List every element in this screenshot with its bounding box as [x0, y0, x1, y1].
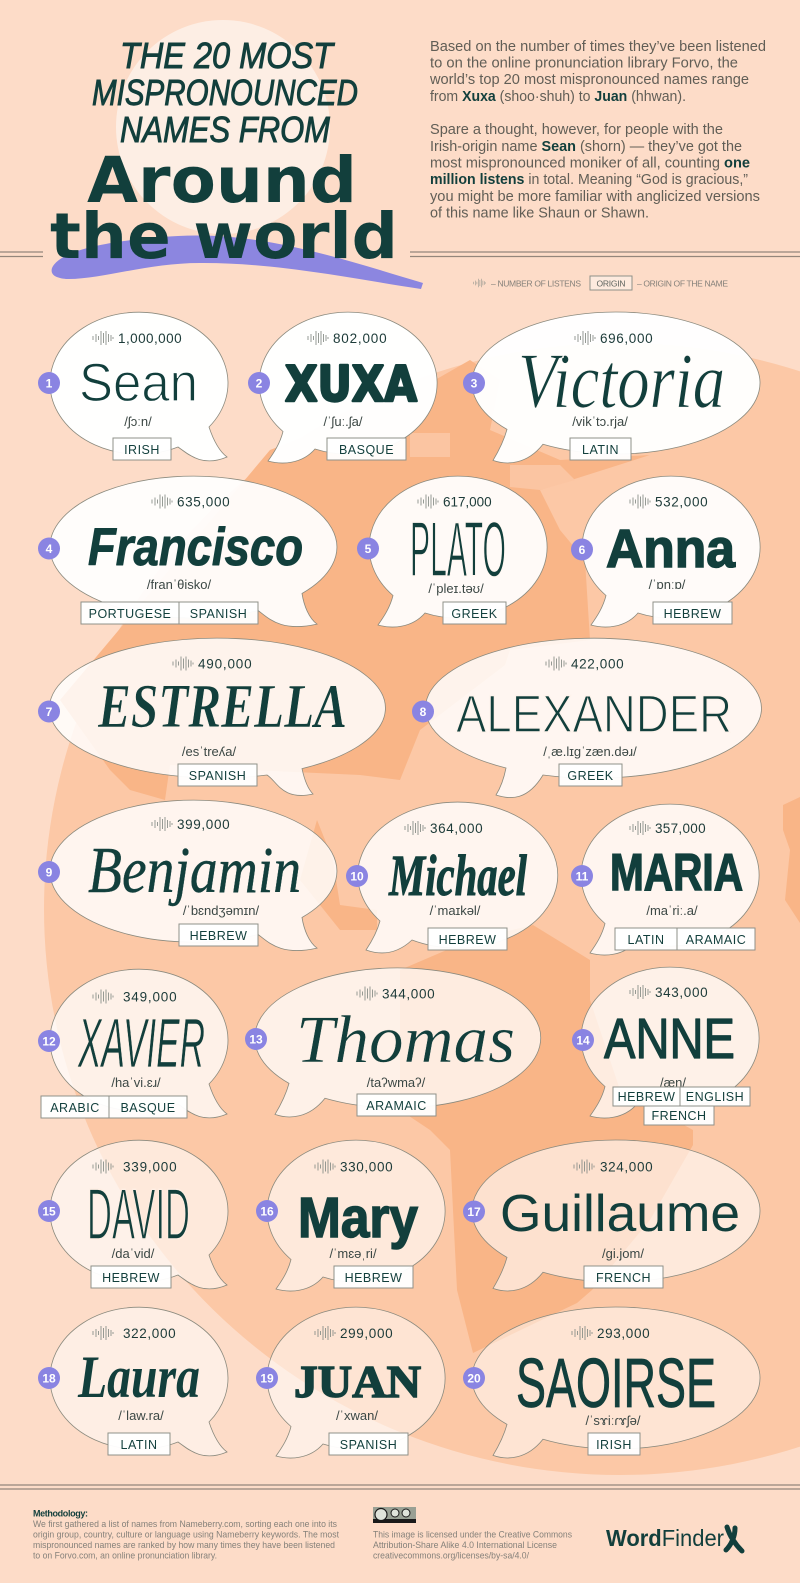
origin tag: LATIN: [582, 443, 619, 457]
listens: 802,000: [333, 331, 387, 346]
origin tag: FRENCH: [596, 1271, 651, 1285]
origin tag: GREEK: [451, 607, 498, 621]
origin tag: IRISH: [596, 1438, 632, 1452]
name 15: David: DAVID: [87, 1175, 190, 1255]
rank badge: [571, 865, 593, 887]
name: Guillaume: [500, 1185, 740, 1243]
pronunciation: /ʃɔːn/: [124, 414, 152, 429]
origin tag: HEBREW: [439, 933, 496, 947]
brush stroke: [52, 236, 423, 289]
lake patch: [410, 433, 575, 490]
name: Sean: [79, 353, 198, 413]
bubble: [369, 476, 547, 627]
listens: 339,000: [123, 1160, 177, 1174]
origin tag: [559, 764, 622, 786]
rank badge: 6: [579, 543, 586, 557]
origin tag: [443, 602, 506, 624]
rank badge: 14: [576, 1034, 590, 1048]
origin tag: [179, 924, 258, 946]
bubble: [259, 312, 437, 463]
licence text: Attribution-Share Alike 4.0 International License: [373, 1540, 557, 1551]
bubble: [472, 1140, 760, 1291]
listens: 696,000: [600, 331, 653, 346]
name 12: Xavier: [38, 969, 228, 1118]
bubble: [50, 800, 337, 951]
listens: [357, 986, 435, 1002]
origin tags: [81, 602, 258, 624]
rank badge: [572, 1029, 594, 1051]
continent: mid patch: [300, 820, 377, 930]
decorative rules: [0, 252, 800, 1489]
origin tag: LATIN: [120, 1438, 158, 1452]
bubble: [581, 804, 759, 955]
name 3: Victoria: [463, 312, 760, 463]
bubble: [425, 638, 761, 798]
rank badge: [245, 1028, 267, 1050]
name: Mary: [298, 1186, 418, 1250]
origin tag: [329, 1433, 408, 1455]
name: MARIA: [610, 844, 743, 902]
origin tag: [584, 1266, 663, 1288]
name 14: Anne: [572, 967, 759, 1125]
name 5: Plato: [357, 476, 547, 627]
name: Anna: [606, 519, 736, 579]
listens: [574, 1160, 653, 1174]
listens: [405, 821, 483, 836]
rank badge: 13: [249, 1032, 263, 1046]
name 11: Maria: [571, 804, 759, 955]
rank badge: [346, 865, 368, 887]
origin tag: [334, 1266, 413, 1288]
origin tag: [178, 764, 257, 786]
listens: [418, 494, 492, 510]
methodology: Methodology:: [33, 1508, 88, 1518]
origin tags: ENGLISH: [686, 1090, 744, 1104]
rank badge: [248, 372, 270, 394]
listens: 532,000: [655, 494, 708, 510]
bubble: [50, 1307, 228, 1456]
origin tag: [570, 438, 631, 460]
listens: 490,000: [198, 656, 252, 672]
origin tag: [327, 438, 406, 460]
pronunciation: /ˈsɤiːɾɤʃə/: [585, 1413, 641, 1428]
rank badge: 19: [260, 1372, 274, 1386]
origin tag: [357, 1094, 436, 1116]
rank badge: [38, 372, 60, 394]
rank badge: [256, 1200, 278, 1222]
title block: [50, 20, 423, 289]
methodology: [33, 1508, 339, 1562]
bubble: [472, 312, 760, 463]
origin tags: [41, 1096, 187, 1118]
bubble: [267, 1140, 445, 1291]
rank badge: 1: [46, 376, 53, 390]
title glow ellipse: [116, 20, 330, 234]
name: ANNE: [604, 1007, 735, 1071]
listens: 293,000: [597, 1326, 650, 1341]
origin tags: SPANISH: [190, 607, 247, 621]
title line 5: the world: [50, 200, 398, 273]
origin tag: [91, 1266, 171, 1288]
name 1: Sean: [38, 312, 228, 461]
origin tag: IRISH: [124, 443, 160, 457]
pronunciation: /ˈmaɪkəl/: [430, 903, 481, 918]
rank badge: 4: [46, 542, 53, 556]
pronunciation: /ˈɒnːɒ/: [649, 577, 686, 592]
origin tag: HEBREW: [102, 1271, 160, 1285]
listens: 617,000: [443, 494, 492, 510]
bubble: [50, 1140, 228, 1289]
rank badge: 16: [260, 1204, 274, 1218]
rank badge: 18: [42, 1372, 56, 1386]
listens: 344,000: [382, 986, 435, 1002]
logo: WordFinderX: WordFinder: [606, 1525, 724, 1551]
pronunciation: /maˈriː.a/: [646, 903, 698, 918]
origin tag: SPANISH: [340, 1438, 397, 1452]
name 20: Saoirse: [463, 1307, 760, 1458]
listens: [572, 1326, 650, 1341]
name: Thomas: [296, 1001, 515, 1077]
rank badge: 17: [467, 1205, 481, 1219]
name 6: Anna: [571, 476, 760, 627]
name 18: Laura: [38, 1307, 228, 1456]
rank badge: 12: [42, 1034, 56, 1048]
pronunciation: /ˈbɛndʒəmɪn/: [183, 903, 259, 918]
rank badge: [38, 700, 60, 722]
name: Benjamin: [88, 834, 301, 907]
origin tags: [615, 928, 755, 950]
pronunciation: /esˈtreʎa/: [182, 744, 236, 759]
creative commons badge: [373, 1507, 416, 1523]
listens: [152, 817, 230, 832]
name: XUXA: [285, 356, 417, 413]
name 9: Benjamin: [38, 800, 337, 951]
origin tag: ARAMAIC: [366, 1099, 427, 1113]
bubble: [267, 1307, 445, 1458]
origin tags: ARAMAIC: [686, 933, 746, 947]
listens: 1,000,000: [118, 331, 182, 346]
rank badge: 15: [42, 1204, 56, 1218]
rank badge: [412, 700, 434, 722]
legend origin word: ORIGIN: [596, 278, 626, 288]
bubble: [50, 312, 228, 461]
intro paragraph: [429, 39, 766, 222]
listens: [93, 1326, 176, 1341]
listens: 357,000: [655, 821, 706, 836]
licence text: [373, 1530, 572, 1562]
name: Francisco: [88, 518, 303, 577]
origin tag: [588, 1433, 640, 1455]
name 4: Francisco: [38, 476, 337, 627]
intro paragraph: most mispronounced moniker of all, counting one: [430, 156, 750, 172]
name 7: Estrella: [38, 638, 385, 795]
title line 2: MISPRONOUNCED: [92, 72, 358, 113]
rank badge: [463, 1200, 485, 1222]
rank badge: [38, 1200, 60, 1222]
listens: 343,000: [655, 985, 708, 1000]
origin tags: FRENCH: [651, 1109, 707, 1123]
name: Victoria: [518, 337, 725, 424]
bubble: [358, 802, 558, 953]
methodology: origin group, country, culture or language using Nameberry keywords. The most: [33, 1530, 339, 1540]
rank badge: 3: [471, 376, 478, 390]
name: JUAN: [294, 1356, 421, 1407]
listens: [93, 1160, 177, 1174]
name 10: Michael: [346, 802, 558, 953]
origin tag: HEBREW: [345, 1271, 402, 1285]
logo X mark: [726, 1527, 742, 1551]
origin tags: [613, 1087, 750, 1125]
listens: [546, 656, 624, 672]
rank badge: [357, 538, 379, 560]
name: ESTRELLA: [97, 673, 347, 741]
listens: [173, 656, 252, 672]
origin tag: BASQUE: [339, 443, 394, 457]
intro paragraph: to on the online pronunciation library Forvo, the: [430, 56, 738, 72]
intro paragraph: of this name like Shaun or Shawn.: [430, 206, 649, 222]
name 2: Xuxa: [248, 312, 437, 463]
legend: [474, 276, 728, 290]
listens: 364,000: [430, 821, 483, 836]
rank badge: [256, 1367, 278, 1389]
pronunciation: /ˈpleɪ.təʊ/: [428, 581, 484, 596]
rank badge: 8: [420, 705, 427, 719]
origin tags: HEBREW: [618, 1090, 675, 1104]
continent: right patch: [783, 797, 800, 923]
name 16: Mary: [256, 1140, 445, 1291]
pronunciation: /ˈʃuː.ʃa/: [323, 414, 363, 429]
intro paragraph: world’s top 20 most mispronounced names range: [429, 72, 749, 88]
listens: 349,000: [123, 990, 177, 1004]
name 5: Plato: PLATO: [410, 505, 506, 593]
listens: [152, 494, 230, 510]
rank badge: 10: [350, 870, 364, 884]
rank badge: [38, 538, 60, 560]
pronunciation: /ˈxwan/: [336, 1408, 378, 1423]
rank badge: [38, 861, 60, 883]
intro paragraph: million listens in total. Meaning “God is gracious,”: [430, 172, 748, 188]
listens: [630, 494, 708, 510]
intro paragraph: from Xuxa (shoo·shuh) to Juan (hhwan).: [430, 89, 686, 105]
icon: listens waveform: [474, 279, 486, 287]
bubble: [255, 968, 541, 1117]
rank badge: [38, 1030, 60, 1052]
pronunciation: /vikˈtɔ.rja/: [572, 414, 628, 429]
rank badge: 5: [365, 542, 372, 556]
intro paragraph: Irish-origin name Sean (shorn) — they’ve got the: [430, 139, 742, 155]
rank badge: 9: [46, 866, 53, 880]
name: Michael: [388, 843, 528, 908]
pronunciation: /franˈθisko/: [147, 577, 212, 592]
listens: 330,000: [340, 1160, 393, 1174]
licence text: This image is licensed under the Creative Commons: [373, 1530, 572, 1540]
continent: north america: [60, 360, 650, 800]
methodology: mispronounced names are ranked by how many times they have been listened: [33, 1540, 335, 1551]
licence text: creativecommons.org/licenses/by-sa/4.0/: [373, 1550, 529, 1562]
name 13: Thomas: [245, 968, 541, 1117]
bubble: [50, 969, 228, 1118]
rank badge: [463, 372, 485, 394]
origin tags: ARABIC: [50, 1101, 100, 1115]
name 15: David: [38, 1140, 228, 1289]
rank badge: [38, 1367, 60, 1389]
rank badge: 11: [576, 870, 589, 884]
origin tags: BASQUE: [120, 1101, 176, 1115]
name: XAVIER: [77, 1004, 205, 1082]
listens: [315, 1160, 393, 1174]
origin tags: PORTUGESE: [89, 607, 171, 621]
continent: south america: [400, 925, 693, 1353]
bubble: [49, 638, 385, 795]
legend label: listens: – NUMBER OF LISTENS: [491, 278, 581, 288]
globe background: [44, 343, 800, 1475]
origin tag: HEBREW: [664, 607, 721, 621]
pronunciation: /taʔwmaʔ/: [367, 1075, 426, 1090]
bubble: [472, 1307, 760, 1458]
origin tags: LATIN: [628, 933, 664, 947]
listens: 635,000: [177, 494, 230, 510]
origin tag: [428, 928, 507, 950]
listens: [93, 990, 177, 1004]
title line 1: THE 20 MOST: [120, 35, 336, 76]
origin tag: [108, 1433, 170, 1455]
rank badge: 2: [256, 376, 263, 390]
legend label: origin: – ORIGIN OF THE NAME: [637, 278, 728, 288]
listens: [315, 1326, 393, 1341]
listens: [630, 985, 708, 1000]
rank badge: 7: [46, 705, 53, 719]
name: ALEXANDER: [456, 685, 732, 744]
pronunciation: /ˈlaw.ra/: [118, 1408, 164, 1423]
title line 4: Around: [87, 144, 357, 217]
listens: [308, 331, 387, 346]
pronunciation: /gi.jom/: [602, 1246, 644, 1261]
listens: 399,000: [177, 817, 230, 832]
name 8: Alexander: [412, 638, 761, 798]
origin tag: [653, 602, 732, 624]
pronunciation: /ˈmɛəˌri/: [329, 1246, 377, 1261]
intro paragraph: you might be more familiar with anglicized versions: [430, 189, 760, 205]
bubble: [582, 476, 760, 627]
rank badge: 20: [467, 1372, 481, 1386]
title line 3: NAMES FROM: [120, 109, 330, 150]
pronunciation: /daˈvid/: [112, 1246, 155, 1261]
methodology: to on Forvo.com, an online pronunciation library.: [33, 1550, 217, 1562]
pronunciation: /ˌæ.lɪgˈzæn.dəɹ/: [543, 744, 637, 759]
name 19: Juan: [256, 1307, 445, 1458]
listens: 324,000: [600, 1160, 653, 1174]
pronunciation: /æn/: [660, 1075, 686, 1090]
intro paragraph: Spare a thought, however, for people with the: [430, 122, 723, 138]
bubble: [50, 476, 337, 627]
legend origin tag: [590, 276, 632, 290]
origin tag: GREEK: [567, 769, 614, 783]
rank badge: [571, 538, 593, 560]
bubble: [581, 967, 759, 1118]
listens: [630, 821, 706, 836]
methodology: We first gathered a list of names from Nameberry.com, sorting each one into its: [33, 1519, 337, 1530]
rank badge: [463, 1367, 485, 1389]
intro paragraph: Based on the number of times they’ve been listened: [430, 39, 766, 55]
listens: 322,000: [123, 1326, 176, 1341]
name: Laura: [77, 1344, 200, 1410]
name 17: Guillaume: [463, 1140, 760, 1291]
pronunciation: /haˈvi.ɛɹ/: [111, 1075, 161, 1090]
listens: [575, 331, 653, 346]
listens: 422,000: [571, 656, 624, 672]
origin tag: SPANISH: [189, 769, 246, 783]
origin tag: [113, 438, 171, 460]
origin tag: HEBREW: [190, 929, 247, 943]
listens: 299,000: [340, 1326, 393, 1341]
